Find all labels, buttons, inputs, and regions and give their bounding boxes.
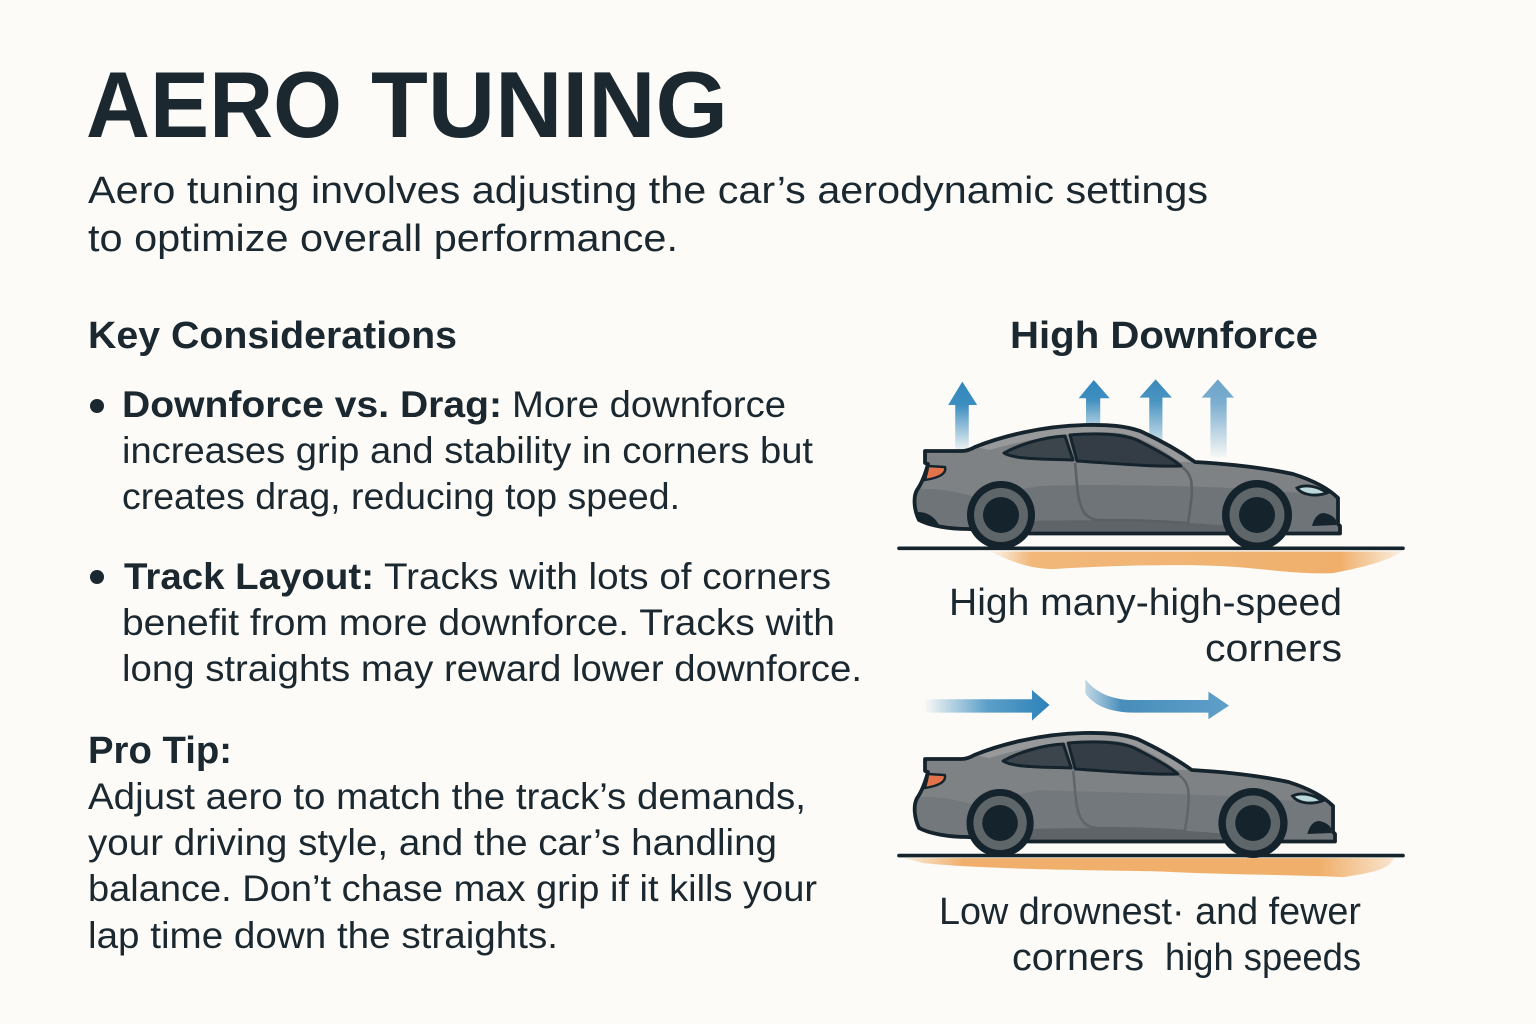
bullet: track layout [90,556,862,689]
icon: grey car [910,425,1345,550]
caption: low downforce: Low drownest· and fewer [939,891,1361,933]
windows [1004,436,1073,460]
head light [1297,486,1327,495]
bullet: downforce vs drag: Downforce vs. Drag: [122,384,502,425]
tail light [925,466,945,480]
wheels [967,481,1035,549]
caption: high downforce [949,582,1342,670]
bullet: track layout: Track Layout: [124,556,374,597]
intro text [88,170,1208,260]
wheels [966,789,1034,857]
pro tip [88,730,817,956]
door lines [1075,463,1192,523]
caption: low downforce: corners [1012,937,1144,979]
illustration: low downforce car [899,679,1403,877]
downforce glow under car [990,551,1402,573]
downforce glow under car [904,858,1394,877]
tail light [925,774,945,788]
icon: upward airflow arrows [948,379,1234,457]
pro tip: Pro Tip: [88,730,232,772]
title: AERO [86,52,342,157]
title: TUNING [371,52,728,157]
bullet: track layout: Tracks with lots of corners [384,556,831,597]
caption: high downforce: corners [1205,628,1342,670]
windows [1003,744,1071,768]
heading: key considerations: Key Considerations [88,315,457,357]
bullet: downforce vs drag: increases grip and stability in corners but [122,430,814,471]
heading: high downforce: High Downforce [1010,315,1318,357]
title [86,52,728,157]
head light [1293,794,1322,803]
pro tip: lap time down the straights. [88,915,558,956]
pro tip: your driving style, and the car’s handling [88,822,777,863]
ground line [899,854,1403,857]
intro text: to optimize overall performance. [88,218,678,260]
bullet: downforce vs drag: More downforce [512,384,786,425]
intro text: Aero tuning involves adjusting the car’s aerodynamic settings [88,170,1208,212]
caption: low downforce: high speeds [1165,937,1361,979]
icon: straight airflow arrow [925,690,1050,721]
vents [918,512,940,527]
bullet: downforce vs drag: creates drag, reducing top speed. [122,476,680,517]
illustration: high downforce car [899,379,1403,573]
icon: curved airflow arrow [1085,679,1229,719]
pro tip: Adjust aero to match the track’s demands, [88,776,806,817]
caption: high downforce: High many-high-speed [949,582,1342,624]
door lines [1073,771,1189,831]
pro tip: balance. Don’t chase max grip if it kills your [88,868,817,909]
bullet: downforce vs drag [90,384,814,517]
bullet: track layout: benefit from more downforce. Tracks with [122,602,835,643]
vent [1307,821,1331,834]
bullet: track layout: long straights may reward lower downforce. [122,648,862,689]
icon: grey car [910,733,1340,858]
ground line [899,546,1403,550]
caption: low downforce [939,891,1361,979]
